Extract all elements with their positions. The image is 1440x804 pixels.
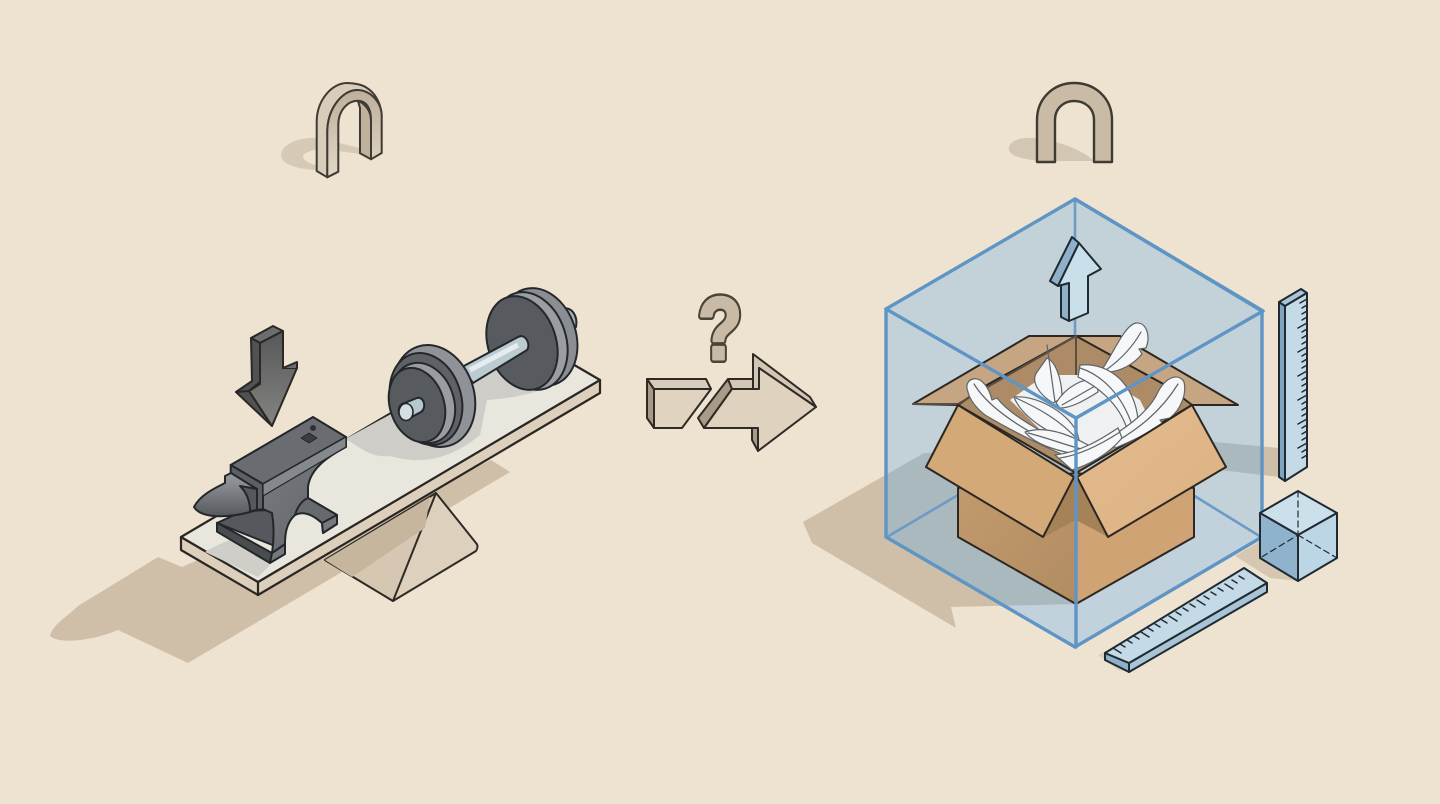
icon: small arch viewed at an angle xyxy=(281,83,382,177)
top face xyxy=(231,417,346,484)
tick marks xyxy=(1113,576,1244,653)
glass cube front edges xyxy=(886,199,1263,647)
far hub xyxy=(562,308,576,330)
illustration: which is heavier, which is bigger xyxy=(50,82,1338,673)
question mark: ? xyxy=(698,280,742,379)
shadow: box and cube cast on the ground xyxy=(803,441,1279,628)
far plates xyxy=(488,278,590,396)
anvil xyxy=(194,417,346,563)
icon: small arch viewed straight on xyxy=(1009,83,1112,162)
near plates xyxy=(380,334,488,458)
dumbbell xyxy=(378,278,590,458)
arrow: broken block, left fragment xyxy=(647,379,711,428)
shadow: seesaw cast on the ground xyxy=(50,460,510,663)
stub axle xyxy=(399,398,424,419)
shadowed recess under the horn xyxy=(217,510,285,550)
ruler: vertical xyxy=(1279,289,1307,481)
foot right xyxy=(295,498,337,533)
back flaps xyxy=(913,336,1076,405)
reference cube xyxy=(1260,491,1337,581)
fulcrum wedge xyxy=(325,493,478,601)
glass cube back xyxy=(888,201,1260,644)
plank xyxy=(181,335,600,595)
feathers xyxy=(967,323,1185,470)
arrow: broken block, right head xyxy=(698,354,816,451)
shadow: ruler on the ground xyxy=(1098,650,1130,672)
white backing of the pile xyxy=(1010,375,1150,465)
foot left xyxy=(217,523,272,563)
seesaw xyxy=(181,335,600,601)
front flaps xyxy=(926,405,1074,537)
horn xyxy=(194,473,257,516)
ruler: horizontal xyxy=(1105,568,1267,672)
arrow: upward, light xyxy=(1050,237,1101,321)
cardboard box xyxy=(913,323,1238,604)
tick marks xyxy=(1298,299,1307,458)
shadow: small cube on the ground xyxy=(1235,540,1298,581)
arrow: downward, heavy xyxy=(236,326,297,426)
question mark: ? xyxy=(698,280,742,379)
box sides xyxy=(958,473,1076,604)
body waist xyxy=(263,437,346,553)
shadow seen through glass xyxy=(888,442,1260,606)
bar xyxy=(462,336,528,383)
shadow of dumbbell on plank xyxy=(347,336,572,460)
